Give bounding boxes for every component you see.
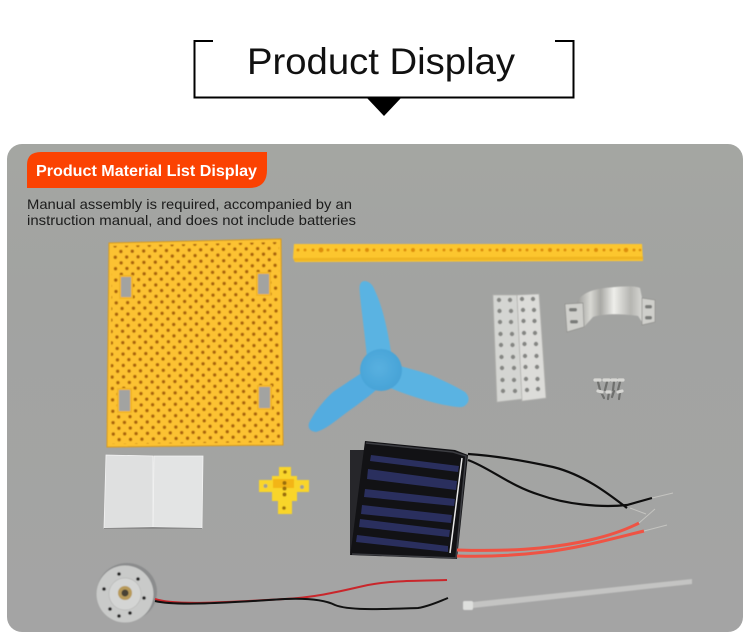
text: assembly note: instruction manual, and does not include batteries: [27, 212, 356, 228]
blue propeller: [309, 281, 469, 432]
black wires: [468, 454, 652, 508]
text: assembly note: Manual assembly is required, accompanied by an: [27, 196, 352, 212]
white cable tie: [463, 579, 692, 610]
text: assembly note: [27, 196, 356, 228]
icon: down arrow: [367, 98, 401, 116]
panel: product photo: [7, 144, 743, 632]
yellow cross connector: [259, 467, 309, 514]
badge: material list: Product Material List Display: [36, 163, 257, 180]
motor wires: [155, 580, 448, 609]
motor: [96, 563, 157, 622]
solar panel with wires: [350, 441, 673, 559]
red wires: [457, 523, 644, 556]
yellow perforated rail: [293, 244, 643, 262]
perforated yellow plate: [107, 239, 283, 447]
title: Product Display: [247, 41, 516, 82]
white foam pads: [104, 455, 203, 529]
badge: material list: [27, 152, 267, 188]
perforated metal strips: [493, 294, 546, 402]
metal motor bracket: [565, 286, 655, 332]
title frame: [194, 41, 574, 116]
metal screws: [595, 380, 623, 399]
